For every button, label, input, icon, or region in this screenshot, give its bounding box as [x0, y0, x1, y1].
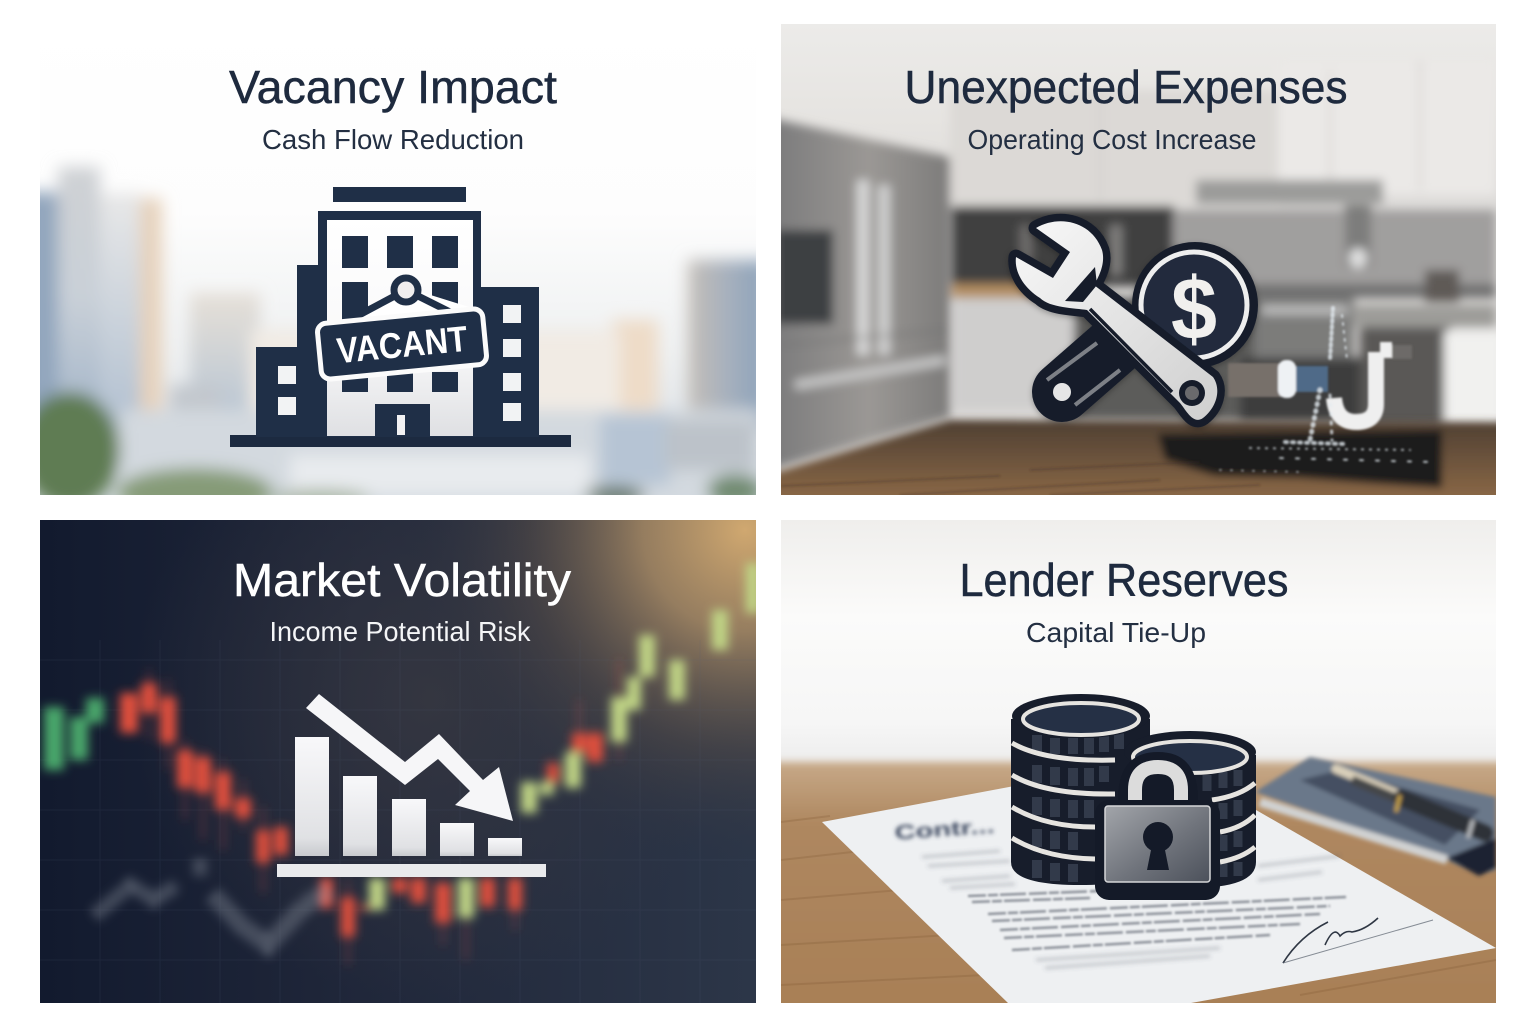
desk background	[770, 520, 1510, 1012]
contract paper	[822, 770, 1496, 1003]
icon: vacant sign: VACANT	[335, 318, 469, 371]
right coin stack	[1123, 731, 1256, 888]
dark tool handle	[1047, 337, 1125, 405]
heading: Unexpected Expenses: Unexpected Expenses	[904, 61, 1348, 113]
heading: Vacancy Impact: Vacancy Impact	[229, 61, 557, 113]
dollar coin: $	[1171, 259, 1217, 358]
icon: falling bar chart	[277, 694, 546, 877]
icon: vacant building	[230, 187, 571, 447]
leaking pipe	[781, 308, 1430, 495]
left coin stack	[1011, 694, 1150, 885]
panel: lender reserves	[781, 520, 1496, 1003]
subheading: Income Potential Risk: Income Potential Risk	[270, 616, 531, 647]
floor and water	[770, 420, 1510, 505]
dollar coin	[1132, 242, 1258, 368]
subheading: Operating Cost Increase: Operating Cost Increase	[968, 124, 1256, 155]
kitchen background photo	[770, 24, 1510, 505]
city background photo	[20, 24, 768, 516]
heading: Lender Reserves: Lender Reserves	[960, 554, 1288, 606]
panel: vacancy impact	[40, 61, 756, 495]
icon: wrench and dollar coin	[1016, 221, 1258, 420]
icon: locked coin stacks	[1011, 694, 1256, 900]
subheading: Cash Flow Reduction: Cash Flow Reduction	[262, 124, 524, 155]
padlock	[1095, 752, 1220, 900]
contract paper: Contr...	[894, 816, 995, 844]
heading: Market Volatility: Market Volatility	[233, 554, 571, 606]
panel: unexpected expenses	[781, 24, 1496, 495]
panel: market volatility	[40, 520, 756, 1003]
icon: vacant sign	[317, 278, 487, 380]
trading chart background	[40, 520, 760, 1003]
silver wrench	[1016, 221, 1217, 420]
pen and notebook	[1255, 757, 1496, 876]
blurred candlesticks	[44, 563, 760, 965]
arrow: downward trend	[306, 694, 513, 821]
subheading: Capital Tie-Up: Capital Tie-Up	[1026, 617, 1206, 648]
